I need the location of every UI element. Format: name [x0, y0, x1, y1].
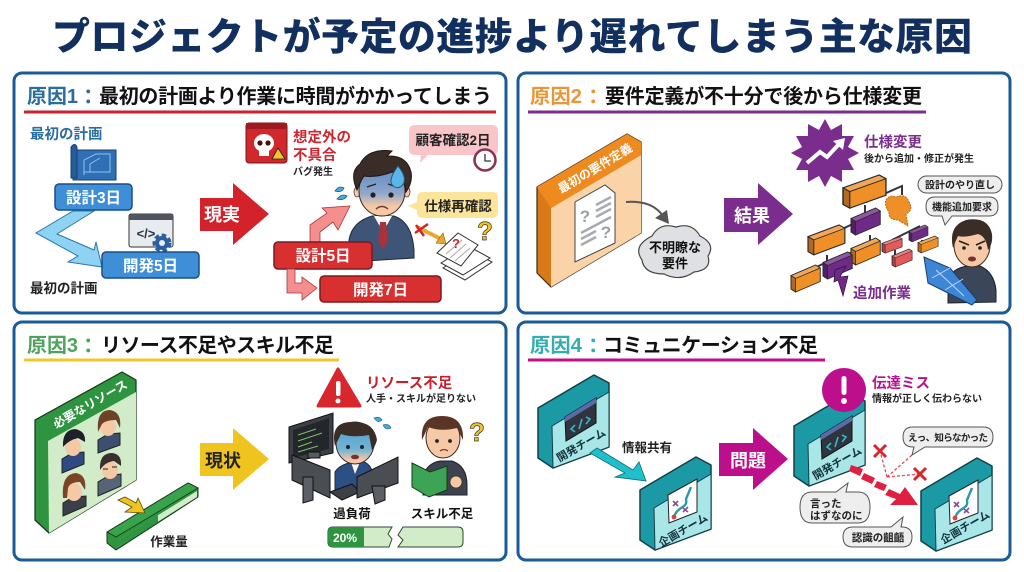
lines: failed messages — [874, 445, 926, 480]
arrow: result — [724, 183, 793, 245]
box: development 7 days: 開発7日 — [353, 281, 408, 299]
heading: cause 1: ： — [78, 86, 98, 109]
icon: alert circle — [822, 368, 866, 412]
heading: cause 2: 要件定義が不十分で後から仕様変更 — [605, 84, 922, 108]
label: workload: 作業量 — [150, 534, 188, 549]
arrow: result: 結果 — [734, 206, 770, 226]
icon: question mark: ? — [469, 417, 485, 447]
icon: blueprint — [71, 144, 116, 180]
cloud: unclear requirements: 不明瞭な — [649, 240, 701, 255]
label: additional work: 追加作業 — [853, 284, 911, 302]
arrow: reality — [200, 183, 269, 245]
text: resource shortage: リソース不足 — [366, 376, 453, 392]
text: unexpected defects: 想定外の — [293, 129, 351, 146]
bar: workload — [107, 483, 198, 550]
heading: cause 2: ： — [583, 86, 604, 109]
label: initial plan: 最初の計画 — [30, 126, 102, 143]
bubble: customer check — [409, 125, 498, 163]
card: dev team right — [794, 393, 865, 486]
heading: cause 4: ： — [583, 335, 604, 358]
bubble: redo design: 設計のやり直し — [925, 178, 995, 192]
icon: unclear document — [575, 185, 615, 262]
arrow: to workload — [118, 497, 145, 513]
caption: initial plan: 最初の計画 — [30, 280, 98, 296]
person: resource D — [63, 473, 86, 516]
heading: cause 1: 原因1 — [27, 86, 78, 108]
label: info sharing: 情報共有 — [622, 440, 672, 455]
heading: cause 1: 最初の計画より作業に時間がかかってしまう — [99, 84, 492, 108]
heading: cause 3: 原因3 — [27, 335, 78, 357]
text: unexpected defects: バグ発生 — [293, 165, 333, 178]
card: planning team right — [921, 458, 992, 551]
card: dev team: 開発チーム — [554, 425, 608, 465]
bubble: redo design — [918, 176, 1002, 193]
bar: 20% progress: 20% — [333, 531, 357, 545]
card: planning team — [640, 457, 711, 550]
icon: document pile: ? — [452, 236, 460, 251]
bubble: should have said — [800, 483, 870, 523]
title: プロジェクトが予定の進捗より遅れてしまう主な原因 — [52, 16, 972, 59]
text: unexpected defects: 不具合 — [293, 147, 337, 164]
arrow: current state — [200, 428, 269, 490]
card: dev team — [538, 375, 609, 468]
person: worried worker — [335, 151, 414, 262]
label: overload: 過負荷 — [333, 506, 371, 521]
bubble: did not know: えっ、知らなかった — [908, 432, 988, 444]
bubble: perception gap: 認識の齟齬 — [852, 531, 905, 544]
person: resource B — [62, 429, 85, 473]
person: frustrated reader — [924, 219, 996, 305]
bubble: should have said: 言った — [810, 498, 842, 510]
text: resource shortage: 人手・スキルが足りない — [366, 392, 476, 405]
icon: code window — [129, 214, 173, 250]
bar: 20% progress — [328, 527, 463, 547]
arrow: pink up — [310, 206, 350, 242]
box: development 5 days: 開発5日 — [123, 257, 178, 275]
bubble: did not know — [903, 427, 993, 455]
arrow: pink down — [287, 269, 317, 300]
card: dev team right: 開発チーム — [810, 443, 864, 483]
arrow: info sharing — [590, 448, 646, 481]
board: required resources — [35, 372, 136, 533]
panel: cause 2 — [518, 73, 1010, 313]
bubble: new feature request — [926, 197, 998, 225]
arrow: problem: 問題 — [730, 451, 766, 471]
arrow: broken red — [849, 465, 918, 505]
cloud: unclear requirements — [639, 226, 711, 278]
arrow: reality: 現実 — [204, 205, 240, 225]
person: resource C — [98, 453, 121, 496]
person: resource A — [98, 410, 120, 453]
heading: cause 2: 原因2 — [530, 86, 582, 108]
heading: cause 4: 原因4 — [530, 335, 583, 357]
icon: question mark: ? — [477, 216, 493, 246]
text: miscommunication — [872, 375, 982, 405]
icon: bug skull window — [246, 123, 287, 163]
arrow: to cloud — [626, 202, 669, 224]
text: resource shortage — [366, 376, 476, 405]
bubble: new feature request: 機能追加要求 — [932, 200, 992, 214]
cloud: unclear requirements: 要件 — [662, 256, 688, 271]
bubble: spec recheck — [408, 192, 498, 218]
icon: spec change burst — [791, 119, 859, 187]
card: planning team: 企画チーム — [656, 510, 710, 550]
box: development 7 days — [320, 276, 441, 302]
text: spec change — [864, 134, 974, 165]
heading: cause 4: コミュニケーション不足 — [603, 334, 818, 357]
heading: cause 3: リソース不足やスキル不足 — [101, 334, 334, 357]
icon: clock — [474, 150, 496, 170]
heading: cause 3: ： — [78, 335, 98, 358]
panel: cause 3 — [14, 322, 506, 560]
icon: unclear document: ? — [580, 207, 590, 226]
icon: warning triangle — [318, 369, 360, 406]
box: design 5 days: 設計5日 — [295, 247, 351, 265]
arrow: plan flow — [36, 211, 102, 267]
bubble: should have said: はずなのに — [810, 509, 862, 522]
label: skill shortage: スキル不足 — [411, 507, 474, 521]
icon: document pile — [437, 233, 492, 280]
arrow: problem — [719, 428, 788, 490]
icon: conflict arrows — [415, 224, 446, 244]
arrow: current state: 現状 — [205, 451, 241, 471]
board: required resources: 必要なリソース — [50, 377, 130, 431]
board: initial requirements — [537, 134, 641, 287]
person: overloaded developer — [289, 413, 398, 504]
box: development 5 days — [102, 252, 199, 278]
text: miscommunication: 伝達ミス — [872, 375, 930, 392]
bubble: customer check: 顧客確認2日 — [415, 132, 491, 148]
text: unexpected defects — [293, 129, 351, 178]
board: initial requirements: 最初の要件定義 — [555, 140, 635, 196]
person: unskilled worker — [412, 416, 467, 497]
bubble: perception gap — [843, 517, 912, 547]
icon: code window: </> — [137, 226, 156, 241]
panel: cause 4 — [518, 322, 1010, 560]
text: spec change: 仕様変更 — [864, 134, 922, 151]
text: spec change: 後から追加・修正が発生 — [864, 152, 974, 165]
heading: cause 3 — [27, 334, 334, 358]
bubble: spec recheck: 仕様再確認 — [424, 198, 492, 214]
panel: cause 1 — [14, 73, 506, 313]
box: design 3 days — [55, 184, 132, 210]
box: design 3 days: 設計3日 — [66, 189, 121, 207]
card: planning team right: 企画チーム — [938, 507, 992, 547]
box: design 5 days — [274, 242, 372, 269]
chart: org of tasks — [791, 175, 938, 296]
text: miscommunication: 情報が正しく伝わらない — [872, 392, 982, 405]
heading: cause 4 — [530, 334, 818, 358]
icon: unclear document: ? — [601, 223, 611, 242]
